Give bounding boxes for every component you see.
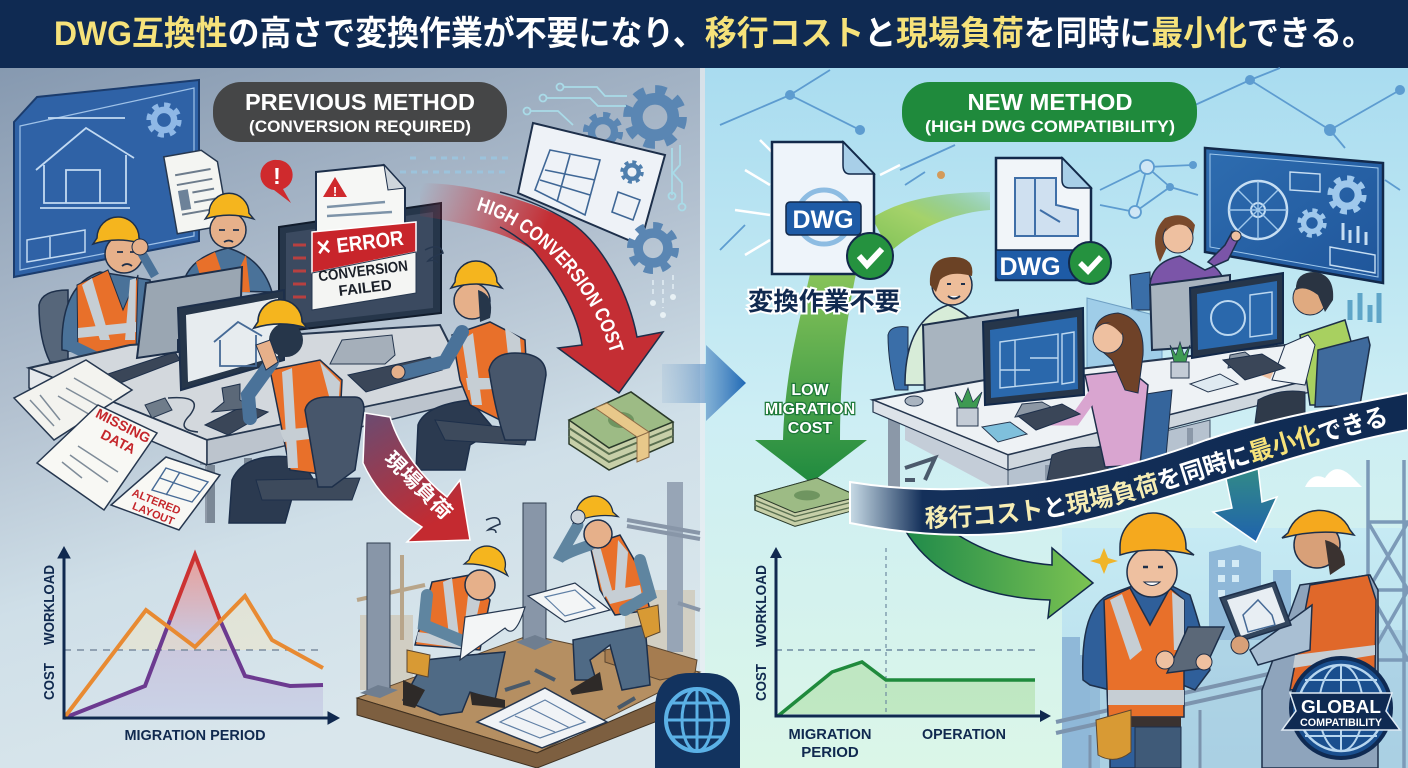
worker: front right with tablet [1220, 510, 1378, 768]
monitors: rear pair right [1150, 275, 1230, 350]
documents: missing data and altered layout: DATA [98, 426, 138, 457]
monitor: house drawing [178, 290, 284, 412]
arrow: blue to site [1213, 440, 1277, 542]
document: DWG drawing: DWG [999, 253, 1061, 281]
monitor: CAD blue [983, 308, 1084, 417]
chart: new method: OPERATION [922, 726, 1006, 743]
error document: CONVERSION [317, 258, 409, 285]
desk: right [873, 345, 1310, 500]
document: DWG with sync [772, 142, 893, 279]
icon: paper report [164, 148, 229, 234]
chart: previous method [41, 547, 339, 744]
documents: missing data and altered layout: LAYOUT [130, 500, 176, 528]
monitor: error screen [279, 203, 441, 332]
banner: minimize cost and load: 移行コストと現場負荷を同時に最小化できる [925, 406, 1386, 530]
icon: sparkle [1090, 548, 1118, 574]
icon: warning bubble: ! [273, 163, 281, 189]
person: woman in pink [1018, 313, 1172, 480]
panel: new method background [705, 68, 1408, 768]
icon: rear monitor left [137, 267, 242, 358]
chart: new method: WORKLOAD [753, 565, 770, 647]
chart: previous method: COST [41, 663, 58, 700]
icons: gears top right and circuit lines [400, 84, 686, 318]
document: DWG with sync: DWG [792, 206, 854, 234]
panel: previous method background [0, 68, 705, 768]
worker: kneeling with plans [403, 518, 525, 715]
scene: city and scaffolding [1056, 460, 1408, 768]
arrow: green down to cost [755, 265, 867, 483]
chart: previous method: MIGRATION PERIOD [124, 727, 266, 744]
worker: kneeling with hand on helmet [528, 493, 660, 695]
badge: new method: NEW METHOD [968, 89, 1132, 115]
desk: left [29, 325, 470, 523]
worker: second rear [182, 193, 272, 292]
error document: ! [333, 184, 337, 199]
badge: new method [902, 82, 1197, 142]
badge: previous method: (CONVERSION REQUIRED) [249, 117, 471, 136]
icon: money stack left [569, 392, 673, 470]
chart: new method: COST [753, 664, 770, 701]
icon: large blueprint screen [1205, 148, 1383, 283]
documents: missing data and altered layout: ALTERED [130, 487, 182, 517]
badge: new method: (HIGH DWG COMPATIBILITY) [925, 117, 1175, 136]
arrow: green down to cost: LOW [791, 382, 830, 399]
arrow: high conversion cost [420, 184, 665, 394]
arrow: green arc between documents [872, 192, 990, 252]
icon: blueprint poster [14, 80, 199, 277]
chart: previous method: WORKLOAD [41, 565, 58, 645]
arrow: green down to cost: MIGRATION [765, 401, 855, 418]
documents: missing data and altered layout: MISSING [93, 405, 153, 446]
person: man in green shirt [888, 257, 990, 390]
divider between panels [700, 68, 705, 690]
error document [312, 165, 416, 310]
title: DWG互換性の高さで変換作業が不要になり、移行コストと現場負荷を同時に最小化できる。 [54, 14, 1374, 53]
icon: centre arrow [662, 345, 746, 421]
badge: global compatibility [1282, 658, 1400, 758]
monitor: rear grey [923, 310, 1020, 398]
arrow: site workload: 現場負荷 [379, 447, 457, 524]
person: woman pointing at screen [1130, 215, 1241, 310]
arrow: green to site [905, 530, 1093, 618]
documents: missing data and altered layout [14, 360, 220, 530]
person: man with green vest [1223, 272, 1370, 423]
document: DWG drawing [996, 158, 1111, 284]
badge: previous method: PREVIOUS METHOD [245, 89, 475, 115]
scene: construction site [357, 482, 700, 768]
icons: desk plants and tablet [955, 342, 1238, 442]
panel: rear partition [1087, 298, 1162, 383]
error document: ✕ ERROR [315, 227, 405, 260]
worker: far left with hand on head [39, 217, 160, 362]
chart: new method: PERIOD [801, 744, 859, 761]
worker: back right at keyboard [391, 247, 546, 470]
badge: previous method [213, 82, 507, 142]
title [0, 0, 1408, 68]
chart: new method: MIGRATION [788, 726, 872, 743]
icon: lower gear [632, 227, 674, 269]
icon: warning bubble [260, 160, 293, 203]
arrow: site workload [363, 413, 470, 542]
error document: FAILED [338, 277, 393, 300]
icon: bar chart mini [1350, 293, 1379, 323]
badge: global compatibility: GLOBAL [1301, 697, 1381, 717]
icon: centre globe [655, 673, 740, 768]
arrow: green down to cost: COST [788, 420, 832, 437]
icon: money stack right [755, 478, 859, 526]
network lines right [720, 68, 1405, 255]
worker: front left with tablet [1083, 513, 1224, 768]
chart: new method [753, 547, 1051, 761]
monitor: right blue [1190, 273, 1283, 368]
arrow: high conversion cost: HIGH CONVERSION COST [477, 197, 624, 350]
icon: blueprint sheet [518, 123, 665, 245]
worker: centre front head in hands [229, 300, 364, 523]
label: no conversion work: 変換作業不要 [748, 288, 900, 316]
badge: global compatibility: COMPATIBILITY [1300, 717, 1383, 729]
